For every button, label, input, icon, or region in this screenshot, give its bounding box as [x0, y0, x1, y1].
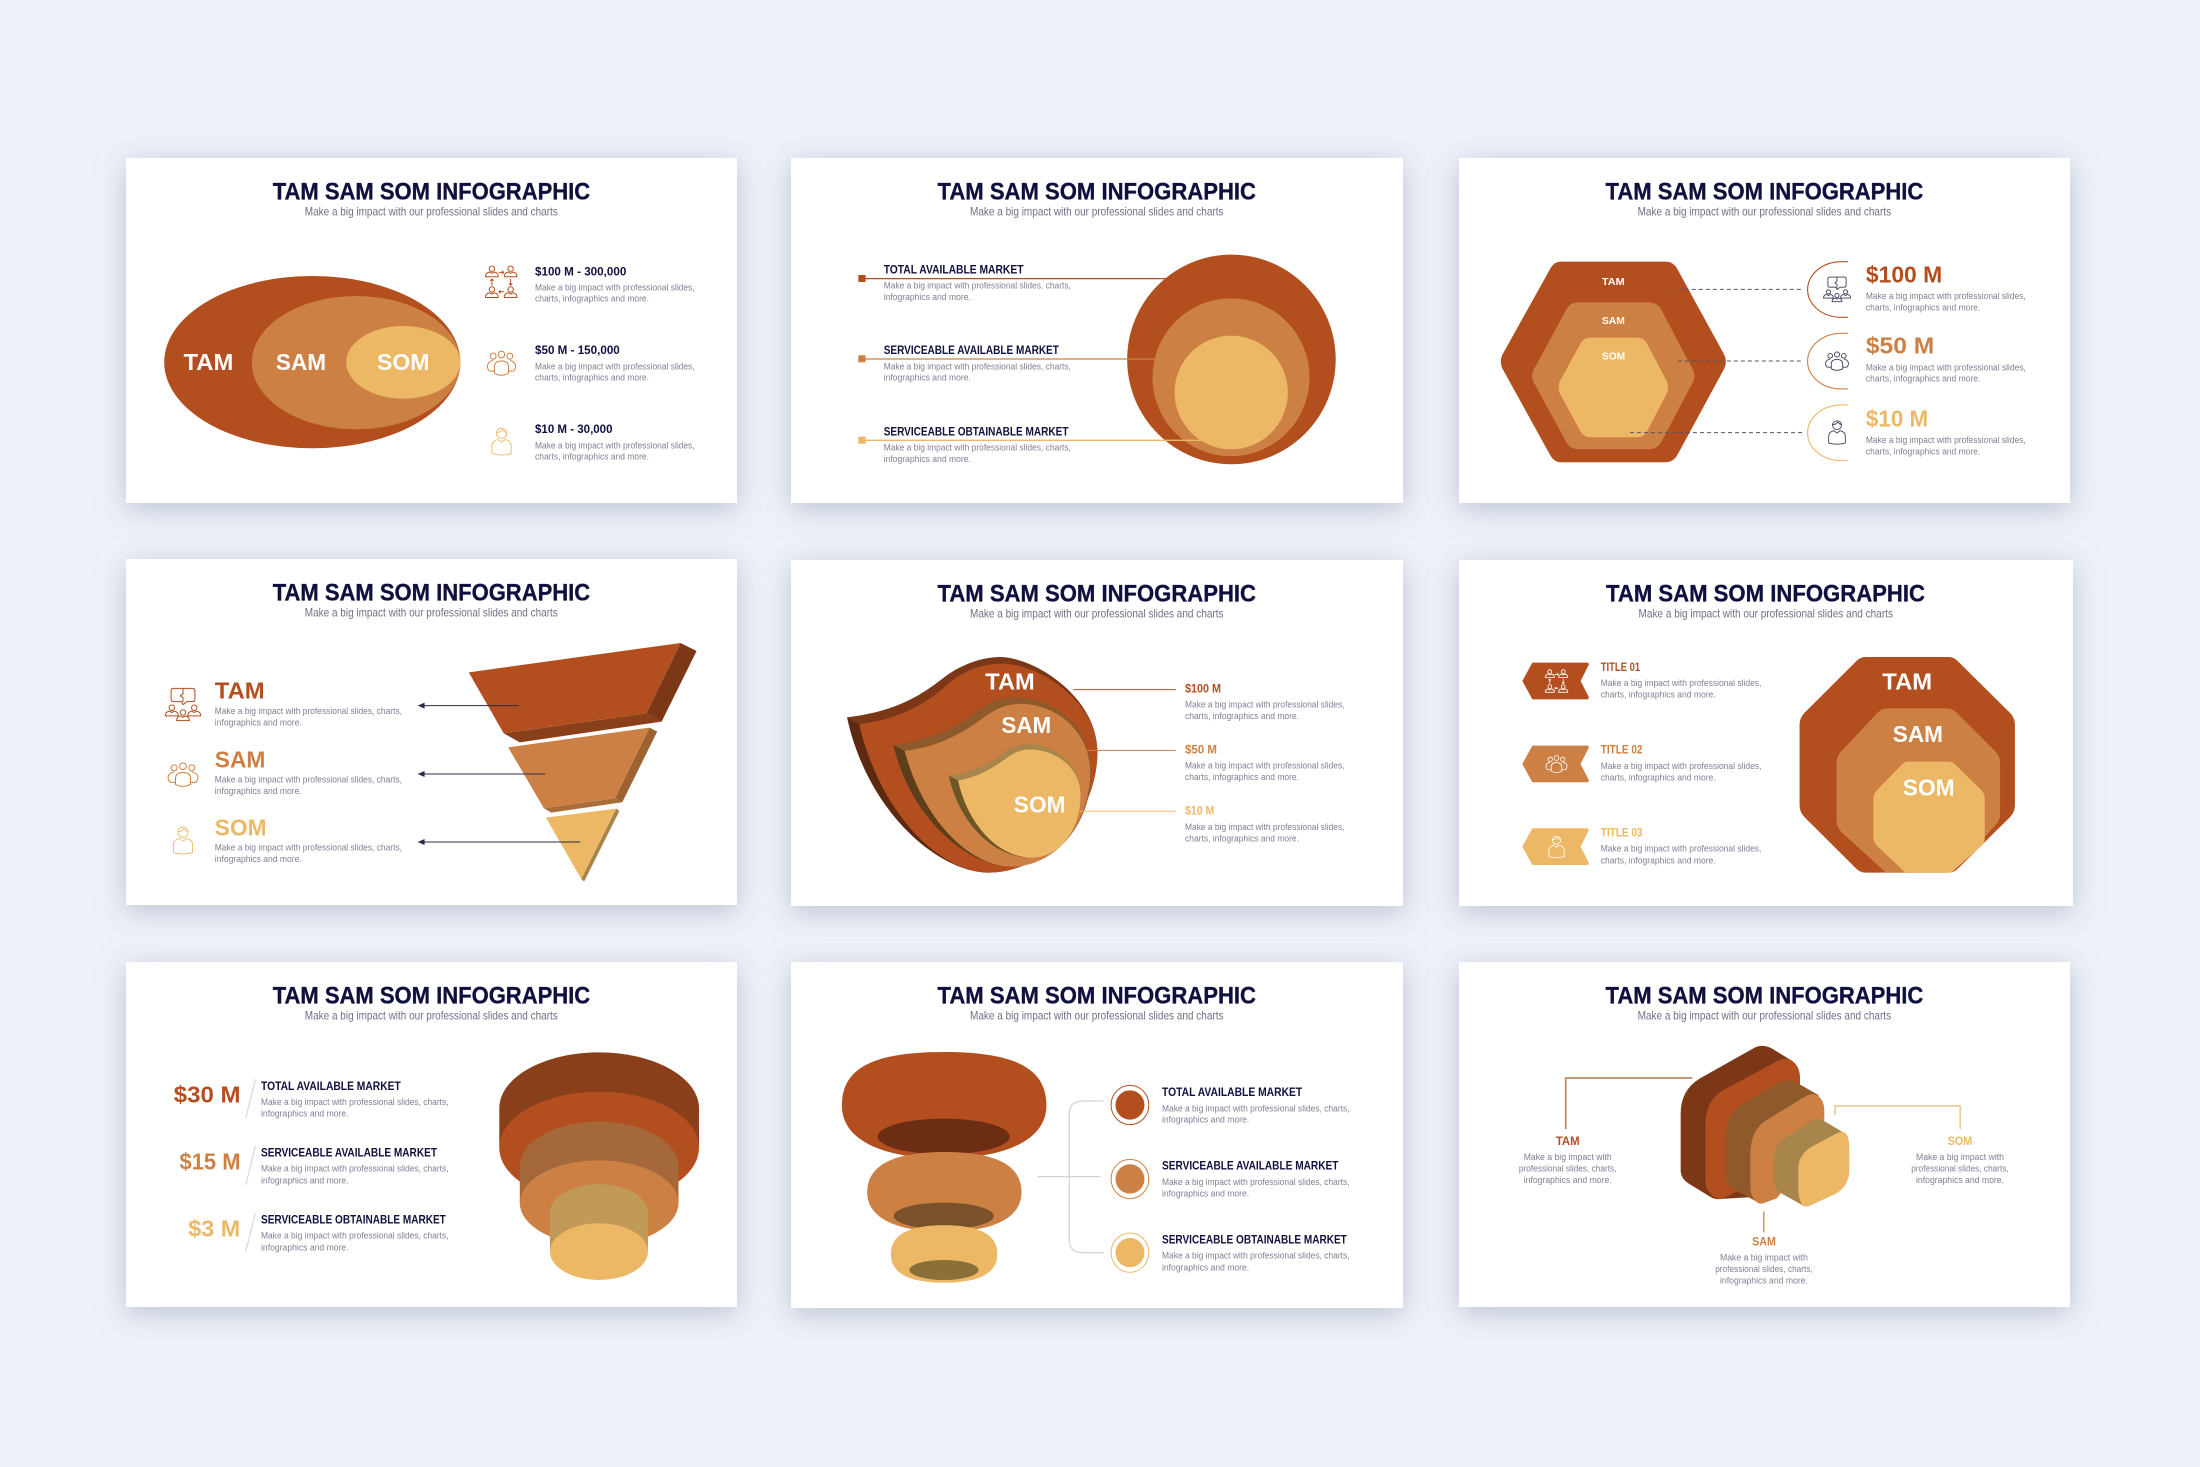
title: TAM SAM SOM INFOGRAPHIC: [1606, 983, 1923, 1010]
icon: group: [168, 763, 198, 786]
icon: group: [1546, 756, 1567, 773]
icon: group: [1826, 352, 1848, 370]
chart: isometric layers: [1681, 1046, 1849, 1207]
text block: $50 M: $50 M: [1866, 333, 1934, 359]
text block: total available market: Make a big impact with professional slides, charts,: [884, 281, 1071, 291]
connectors: [1566, 1078, 1960, 1232]
text block: $3 M serviceable obtainable market: Make a big impact with professional slides, charts,: [261, 1231, 449, 1241]
chart labels: SOM: [1602, 350, 1625, 362]
card background: [791, 158, 1403, 503]
text block: serviceable obtainable market: infographics and more.: [1162, 1262, 1249, 1272]
text block: title 03: [1601, 828, 1761, 865]
text block: serviceable available market: [884, 345, 1071, 383]
chart labels: [1882, 668, 1955, 800]
text block: TAM: [1519, 1136, 1616, 1185]
text block: $100 M: $100 M: [1185, 683, 1221, 695]
text block: SAM: Make a big impact with professional slides, charts,: [215, 774, 402, 784]
text block: $3 M serviceable obtainable market: $3 M: [188, 1216, 240, 1242]
chart labels: TAM: [1882, 668, 1932, 694]
text block: serviceable available market: Make a big impact with professional slides, charts,: [884, 361, 1071, 371]
text block: $50 M: charts, infographics and more.: [1866, 374, 1980, 384]
text block: $50 M: $50 M: [1185, 744, 1217, 756]
text block: serviceable obtainable market: [1162, 1235, 1350, 1272]
chart: bowls, connector and legend dots: [842, 1052, 1149, 1283]
text block: title 03: Make a big impact with professional slides,: [1601, 844, 1761, 854]
card background: [1459, 560, 2073, 906]
text block: $50 M: Make a big impact with professional slides,: [1866, 362, 2026, 372]
text block: $30 M total available market: infographics and more.: [261, 1108, 349, 1118]
text block: $100 M: Make a big impact with professional slides,: [1866, 291, 2026, 301]
text block: serviceable available market: infographics and more.: [884, 373, 971, 383]
chart labels: [985, 668, 1066, 817]
text block: title 01: TITLE 01: [1601, 662, 1641, 674]
title: TAM SAM SOM INFOGRAPHIC: [938, 178, 1256, 205]
text block: $100 M: [1185, 683, 1344, 721]
title: TAM SAM SOM INFOGRAPHIC: [1606, 580, 1925, 607]
title: TAM SAM SOM INFOGRAPHIC: [938, 580, 1256, 607]
text block: SAM: infographics and more.: [1720, 1275, 1808, 1285]
text block: $10 M: $10 M: [1866, 405, 1928, 431]
text block: $30 M total available market: [174, 1081, 449, 1118]
subtitle: Make a big impact with our professional slides and charts: [970, 607, 1224, 621]
subtitle: Make a big impact with our professional slides and charts: [1638, 1009, 1891, 1023]
text block: serviceable available market: Make a big impact with professional slides, charts,: [1162, 1177, 1350, 1187]
text block: title 02: TITLE 02: [1601, 745, 1642, 757]
title: TAM SAM SOM INFOGRAPHIC: [1606, 178, 1923, 205]
text block: $50 M: [535, 345, 695, 383]
text block: $10 M: [1866, 405, 2026, 456]
text block: title 02: charts, infographics and more.: [1601, 772, 1716, 782]
text block: $50 M: [1866, 333, 2026, 384]
icon: group: [487, 351, 516, 375]
text block: $100 M: Make a big impact with professional slides,: [1185, 700, 1344, 710]
text block: SOM: infographics and more.: [215, 854, 302, 864]
text block: $3 M serviceable obtainable market: [188, 1215, 449, 1252]
chart labels: SAM: [1893, 721, 1943, 747]
card background: [1459, 158, 2070, 503]
text block: SAM: professional slides, charts,: [1715, 1264, 1813, 1274]
text block: total available market: Make a big impact with professional slides, charts,: [1162, 1103, 1350, 1113]
panel: slide 6 nested octagons: [1459, 560, 2073, 906]
text block: serviceable obtainable market: Make a big impact with professional slides, charts,: [884, 443, 1071, 453]
text block: title 03: TITLE 03: [1601, 828, 1642, 840]
panel: slide 5 3D shield layers: [791, 560, 1403, 906]
text block: $10 M: charts, infographics and more.: [1866, 446, 1980, 456]
text block: serviceable available market: [1162, 1161, 1350, 1199]
chart labels: TAM: [985, 668, 1035, 694]
text block: $10 M: charts, infographics and more.: [535, 452, 649, 462]
text block: $100 M: charts, infographics and more.: [535, 294, 649, 304]
text block: total available market: infographics and more.: [1162, 1115, 1249, 1125]
text block: total available market: [1162, 1087, 1350, 1125]
text block: $50 M: Make a big impact with professional slides,: [1185, 761, 1344, 771]
text block: TAM: [215, 678, 402, 727]
text block: SAM: [1715, 1236, 1813, 1285]
subtitle: Make a big impact with our professional slides and charts: [1638, 205, 1891, 219]
text block: serviceable available market: SERVICEABLE AVAILABLE MARKET: [1162, 1161, 1338, 1173]
chart: nested hexagons, dashed lines and brackets: [1501, 262, 1848, 462]
icon: network: [486, 266, 517, 297]
text block: SAM: SAM: [215, 746, 265, 772]
chart: stacked cylinders: [246, 1052, 699, 1280]
text block: TAM: Make a big impact with professional slides, charts,: [215, 706, 402, 716]
text block: $100 M: $100 M - 300,000: [535, 266, 626, 278]
text block: title 03: charts, infographics and more.: [1601, 855, 1716, 865]
text block: $100 M: Make a big impact with professional slides,: [535, 282, 695, 292]
text block: $10 M: Make a big impact with professional slides,: [1866, 435, 2026, 445]
text block: serviceable obtainable market: SERVICEABLE OBTAINABLE MARKET: [884, 426, 1068, 438]
icon: network: [1545, 670, 1568, 692]
text block: $50 M: [1185, 744, 1344, 782]
text block: total available market: [884, 264, 1071, 302]
text block: $15 M serviceable available market: SERVICEABLE AVAILABLE MARKET: [261, 1148, 437, 1160]
chart labels: [1602, 276, 1625, 362]
text block: SOM: SOM: [215, 815, 267, 841]
text block: SOM: professional slides, charts,: [1911, 1164, 2009, 1174]
panel: slide 1 nested ellipses: [126, 158, 737, 503]
chart: 3D funnel and arrows: [418, 643, 697, 882]
title: TAM SAM SOM INFOGRAPHIC: [273, 178, 590, 205]
text block: $10 M: Make a big impact with professional slides,: [535, 440, 695, 450]
text block: serviceable available market: SERVICEABLE AVAILABLE MARKET: [884, 345, 1059, 357]
icon: person: [492, 428, 511, 455]
card background: [791, 560, 1403, 906]
text block: $100 M: $100 M: [1866, 261, 1942, 287]
chart labels: SOM: [1014, 791, 1066, 817]
text block: SAM: SAM: [1752, 1236, 1776, 1248]
panel: slide 9 isometric layers: [1459, 962, 2070, 1307]
chart labels: TAM: [184, 349, 233, 375]
text block: $100 M: charts, infographics and more.: [1185, 711, 1299, 721]
text block: serviceable obtainable market: infographics and more.: [884, 454, 971, 464]
subtitle: Make a big impact with our professional slides and charts: [305, 205, 558, 219]
text block: SAM: infographics and more.: [215, 786, 302, 796]
text block: SOM: infographics and more.: [1916, 1175, 2004, 1185]
icon: person: [1549, 836, 1564, 858]
chart labels: TAM: [1602, 276, 1625, 288]
text block: serviceable obtainable market: SERVICEABLE OBTAINABLE MARKET: [1162, 1235, 1347, 1247]
panel: slide 4 3D funnel: [126, 559, 737, 905]
title: TAM SAM SOM INFOGRAPHIC: [273, 983, 590, 1010]
text block: TAM: professional slides, charts,: [1519, 1164, 1616, 1174]
text block: TAM: infographics and more.: [1524, 1175, 1612, 1185]
subtitle: Make a big impact with our professional slides and charts: [970, 1009, 1224, 1023]
text block: $10 M: [1185, 805, 1344, 843]
text block: TAM: TAM: [215, 678, 265, 704]
chart: nested ellipses: [164, 276, 460, 448]
chart labels: SOM: [1903, 774, 1955, 800]
text block: serviceable obtainable market: Make a big impact with professional slides, charts,: [1162, 1251, 1350, 1261]
text block: total available market: infographics and more.: [884, 292, 971, 302]
chart labels: SAM: [1602, 315, 1625, 327]
text block: $30 M total available market: Make a big impact with professional slides, charts,: [261, 1097, 449, 1107]
title: TAM SAM SOM INFOGRAPHIC: [938, 983, 1256, 1010]
text block: total available market: TOTAL AVAILABLE MARKET: [1162, 1087, 1302, 1099]
text block: title 01: [1601, 662, 1761, 699]
subtitle: Make a big impact with our professional slides and charts: [305, 1009, 558, 1023]
chart: shield layers and leader lines: [847, 657, 1176, 873]
text block: $50 M: $50 M - 150,000: [535, 345, 620, 357]
text block: $3 M serviceable obtainable market: infographics and more.: [261, 1242, 349, 1252]
card background: [126, 559, 737, 905]
text block: SOM: [1911, 1136, 2009, 1185]
icon: meeting: [165, 688, 201, 721]
panel: slide 7 stacked cylinders: [126, 962, 737, 1307]
text block: $50 M: charts, infographics and more.: [535, 373, 649, 383]
chart labels: SOM: [377, 349, 429, 375]
text block: serviceable obtainable market: [884, 426, 1071, 464]
card background: [126, 962, 737, 1307]
text block: SOM: SOM: [1948, 1136, 1972, 1148]
text block: total available market: TOTAL AVAILABLE MARKET: [884, 264, 1024, 276]
text block: $50 M: charts, infographics and more.: [1185, 772, 1299, 782]
text block: title 02: [1601, 745, 1761, 782]
chart labels: [184, 349, 429, 375]
card background: [791, 962, 1403, 1308]
panel: slide 3 nested hexagons: [1459, 158, 2070, 503]
icon: person: [1829, 421, 1845, 444]
text block: $100 M: charts, infographics and more.: [1866, 302, 1980, 312]
text block: TAM: Make a big impact with: [1524, 1152, 1612, 1162]
text block: $15 M serviceable available market: [180, 1148, 449, 1185]
chart labels: SAM: [276, 349, 326, 375]
text block: title 01: charts, infographics and more.: [1601, 689, 1716, 699]
text block: SOM: Make a big impact with professional slides, charts,: [215, 843, 402, 853]
text block: $100 M: [1866, 261, 2026, 312]
text block: $50 M: Make a big impact with professional slides,: [535, 361, 695, 371]
icon: meeting: [1823, 277, 1851, 302]
chart: stacked circles and leader lines: [858, 255, 1336, 464]
icon: person: [173, 827, 193, 854]
title: TAM SAM SOM INFOGRAPHIC: [273, 579, 590, 606]
text block: $15 M serviceable available market: infographics and more.: [261, 1175, 349, 1185]
subtitle: Make a big impact with our professional slides and charts: [970, 205, 1224, 219]
text block: $15 M serviceable available market: $15 M: [180, 1149, 240, 1175]
text block: SOM: [215, 815, 402, 864]
text block: SAM: Make a big impact with: [1720, 1252, 1808, 1262]
chart labels: SAM: [1001, 712, 1051, 738]
text block: TAM: TAM: [1556, 1136, 1580, 1148]
text block: $10 M: charts, infographics and more.: [1185, 833, 1299, 843]
text block: TAM: infographics and more.: [215, 717, 302, 727]
text block: $10 M: Make a big impact with professional slides,: [1185, 822, 1344, 832]
card background: [1459, 962, 2070, 1307]
text block: $30 M total available market: TOTAL AVAILABLE MARKET: [261, 1081, 401, 1093]
text block: $10 M: $10 M - 30,000: [535, 424, 612, 436]
text block: serviceable available market: infographics and more.: [1162, 1189, 1249, 1199]
card background: [126, 158, 737, 503]
text block: $10 M: [535, 424, 695, 462]
panel: slide 2 stacked circles with leader lines: [791, 158, 1403, 503]
text block: title 01: Make a big impact with professional slides,: [1601, 678, 1761, 688]
text block: $10 M: $10 M: [1185, 805, 1214, 817]
text block: $3 M serviceable obtainable market: SERVICEABLE OBTAINABLE MARKET: [261, 1215, 446, 1227]
chart: octagons and arrow tags: [1522, 657, 2015, 873]
text block: SAM: [215, 746, 402, 796]
subtitle: Make a big impact with our professional slides and charts: [305, 606, 558, 620]
text block: $15 M serviceable available market: Make a big impact with professional slides, charts,: [261, 1164, 449, 1174]
text block: SOM: Make a big impact with: [1916, 1152, 2004, 1162]
subtitle: Make a big impact with our professional slides and charts: [1638, 607, 1893, 621]
text block: title 02: Make a big impact with professional slides,: [1601, 761, 1761, 771]
text block: $100 M: [535, 266, 695, 304]
text block: $30 M total available market: $30 M: [174, 1082, 240, 1108]
panel: slide 8 stacked bowls: [791, 962, 1403, 1308]
